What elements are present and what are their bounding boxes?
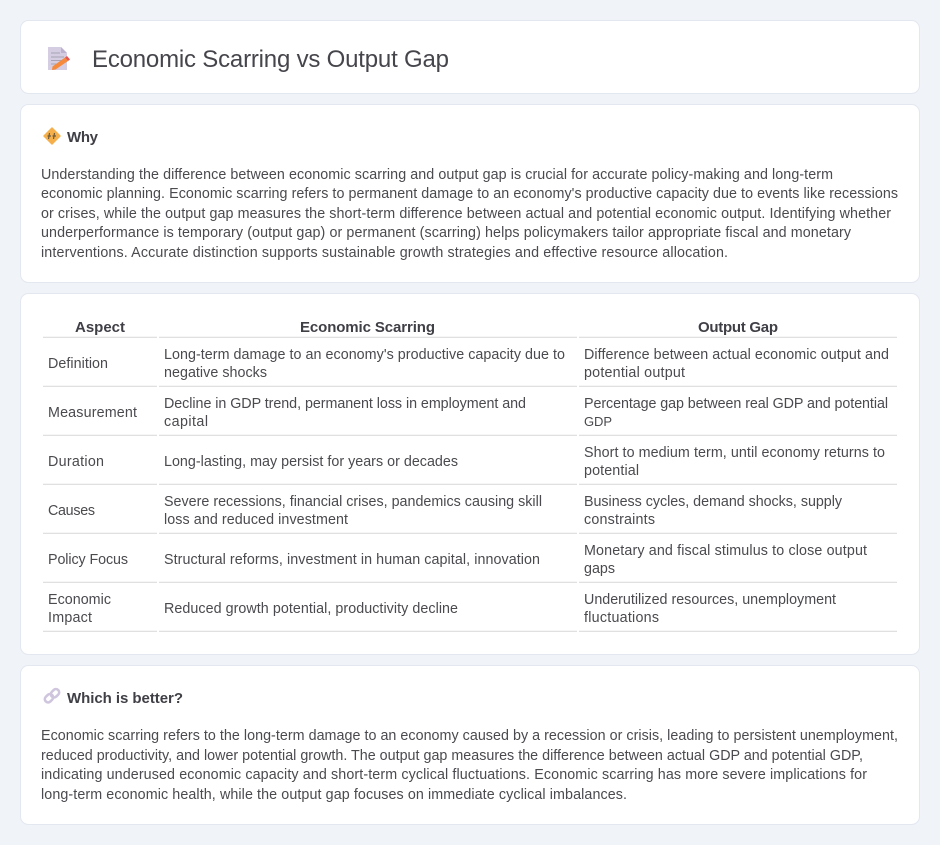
icon: chain link bbox=[44, 688, 60, 704]
text block: why: Understanding the difference between economic scarring and output gap is crucial for accurate policy-making and long-term bbox=[41, 167, 833, 183]
table header row bbox=[43, 319, 897, 338]
icon: warning diamond bbox=[44, 128, 60, 144]
text block: why: economic planning. Economic scarring refers to permanent damage to an economy's productive capacity due to events like recessions bbox=[41, 186, 898, 202]
table row: measurement: Percentage gap between real GDP and potential bbox=[584, 396, 888, 412]
text block: which is better bbox=[41, 728, 898, 803]
panel: which is better bbox=[20, 666, 920, 824]
table row: economic impact: fluctuations bbox=[584, 610, 659, 626]
text block: why: underperformance is temporary (output gap) or permanent (scarring) helps policymakers tailor appropriate fiscal and monetary bbox=[41, 225, 852, 241]
table row: definition: Definition bbox=[48, 356, 108, 372]
table header row: Output Gap bbox=[698, 319, 778, 336]
panel: header bbox=[20, 20, 920, 94]
table row: policy focus: Structural reforms, investment in human capital, innovation bbox=[164, 552, 540, 568]
text block: which is better: indicating underused economic capacity and short-term cyclical fluctuations. Economic scarring has more severe implications for bbox=[41, 767, 867, 783]
heading: why: Why bbox=[67, 129, 99, 146]
panel: comparison table bbox=[20, 294, 920, 654]
table row: measurement: Measurement bbox=[48, 405, 137, 421]
table row: causes: constraints bbox=[584, 512, 655, 528]
table row: definition: Difference between actual economic output and bbox=[584, 347, 889, 363]
table row: policy focus bbox=[43, 543, 897, 583]
table row: duration: potential bbox=[584, 463, 639, 479]
table row: causes: Causes bbox=[48, 503, 95, 519]
table row: definition: Long-term damage to an economy's productive capacity due to bbox=[164, 347, 565, 363]
table row: economic impact: Economic bbox=[48, 592, 111, 608]
table row: duration: Short to medium term, until economy returns to bbox=[584, 445, 885, 461]
table row: causes: loss and reduced investment bbox=[164, 512, 348, 528]
panel: why bbox=[20, 104, 920, 282]
table row: causes: Business cycles, demand shocks, supply bbox=[584, 494, 843, 510]
table row: measurement: Decline in GDP trend, permanent loss in employment and bbox=[164, 396, 526, 412]
title: Economic Scarring vs Output Gap bbox=[92, 46, 449, 73]
table row: measurement: capital bbox=[164, 414, 208, 430]
table row: economic impact bbox=[43, 592, 897, 632]
table row: causes bbox=[43, 494, 897, 534]
heading: which is better: Which is better? bbox=[67, 690, 183, 707]
table row: economic impact: Underutilized resources, unemployment bbox=[584, 592, 836, 608]
table row: policy focus: gaps bbox=[584, 561, 615, 577]
table row: measurement bbox=[43, 396, 897, 436]
table row: definition: negative shocks bbox=[164, 365, 267, 381]
table row: economic impact: Impact bbox=[48, 610, 92, 626]
text block: why: interventions. Accurate distinction supports sustainable growth strategies and effective resource allocation. bbox=[41, 245, 728, 261]
text block: which is better: Economic scarring refers to the long-term damage to an economy caused by a recession or crisis, leading to persistent unemployment, bbox=[41, 728, 898, 744]
table row: economic impact: Reduced growth potential, productivity decline bbox=[164, 601, 458, 617]
table row: duration: Duration bbox=[48, 454, 104, 470]
table row: measurement: GDP bbox=[584, 414, 612, 429]
table row: duration: Long-lasting, may persist for years or decades bbox=[164, 454, 458, 470]
text block: which is better: long-term economic health, while the output gap focuses on immediate cyclical imbalances. bbox=[41, 787, 627, 803]
table header row: Aspect bbox=[75, 319, 125, 336]
table row: causes: Severe recessions, financial crises, pandemics causing skill bbox=[164, 494, 542, 510]
table row: definition: potential output bbox=[584, 365, 685, 381]
text block: why bbox=[41, 167, 898, 261]
table row: duration bbox=[43, 445, 897, 485]
text block: which is better: reduced productivity, and lower potential growth. The output gap measures the difference between actual GDP and potential GDP, bbox=[41, 748, 863, 764]
table header row: Economic Scarring bbox=[300, 319, 435, 336]
icon: document with pencil bbox=[48, 47, 70, 70]
table row: definition bbox=[43, 347, 897, 387]
table row: policy focus: Policy Focus bbox=[48, 552, 128, 568]
table row: policy focus: Monetary and fiscal stimulus to close output bbox=[584, 543, 867, 559]
text block: why: or crises, while the output gap measures the short-term difference between actual and potential economic output. Identifying whether bbox=[41, 206, 891, 222]
